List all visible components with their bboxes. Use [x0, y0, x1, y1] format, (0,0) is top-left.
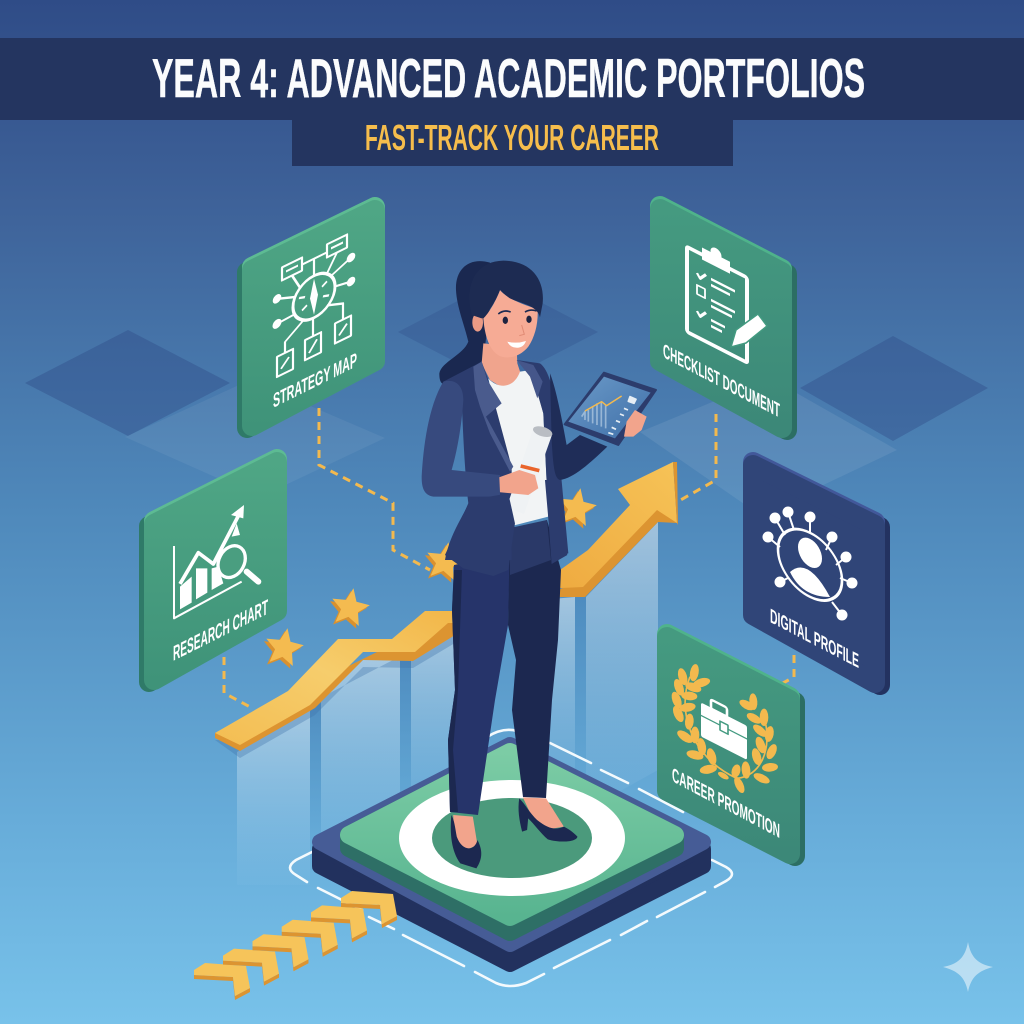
jacket right panel [517, 360, 568, 560]
facial features [498, 310, 537, 348]
neck [482, 343, 521, 388]
panel: career promotion [667, 634, 795, 856]
jacket left panel [443, 362, 512, 560]
panel: strategy map [247, 207, 375, 428]
arrow right segment [540, 462, 678, 597]
icon: chart with magnifier [174, 505, 258, 618]
upper body [422, 261, 656, 560]
growth arrow [215, 462, 678, 758]
right sleeve [550, 373, 607, 480]
chevron 6 [341, 891, 397, 928]
jacket hem [445, 480, 567, 576]
icon: pencil [731, 314, 767, 347]
subtitle: FAST-TRACK YOUR CAREER [365, 117, 659, 158]
icon: laurel wreath [670, 663, 779, 795]
chevron 2 [223, 949, 279, 986]
sparkle watermark [943, 942, 993, 992]
chevron 1 [194, 963, 250, 1000]
hand on scroll [499, 470, 538, 495]
header banner [0, 38, 1024, 166]
label: digital profile: DIGITAL PROFILE [770, 604, 859, 673]
shirt [488, 370, 548, 526]
arrow left segment [215, 611, 460, 758]
right lapel [517, 360, 543, 398]
panel: checklist document [660, 206, 787, 430]
target centre [432, 798, 592, 878]
figure: businesswoman [422, 261, 656, 868]
dashed connectors [224, 408, 794, 708]
platform [320, 745, 703, 964]
trousers [448, 520, 561, 815]
left sleeve [422, 381, 500, 497]
stars [260, 485, 599, 670]
ear [472, 313, 483, 332]
face [483, 290, 538, 357]
platform base [320, 747, 703, 964]
target ring [399, 780, 625, 896]
ponytail [439, 261, 490, 384]
panel: research chart: RESEARCH CHART [173, 595, 268, 666]
star 2 [326, 585, 372, 630]
icon: compass network [274, 231, 354, 379]
chevron 4 [282, 920, 338, 957]
tablet [565, 373, 656, 445]
star 4 [421, 539, 467, 584]
scroll [507, 424, 554, 514]
panel: digital profile [753, 462, 880, 685]
label: career promotion: CAREER PROMOTION [672, 763, 780, 843]
star 1 [260, 625, 306, 670]
star 3 [553, 485, 599, 530]
chevron 5 [311, 905, 367, 942]
background isometric tiles [25, 280, 988, 515]
icon: networked profile [764, 508, 856, 620]
platform green tier side [349, 752, 675, 932]
chevron path [194, 891, 397, 1000]
panel: checklist document: CHECKLIST DOCUMENT [663, 339, 780, 423]
left lapel [473, 362, 513, 472]
pocket [470, 513, 495, 520]
translucent bar columns under the growth arrow [237, 522, 658, 885]
panel: research chart [149, 459, 277, 682]
hand on tablet [624, 410, 647, 437]
feet and heels [451, 797, 577, 868]
chevron 3 [252, 934, 308, 971]
label: strategy map: STRATEGY MAP [273, 349, 357, 413]
platform green top [349, 752, 675, 917]
dashed platform outline [290, 730, 732, 986]
icon: briefcase [701, 694, 747, 760]
hair [469, 261, 543, 318]
icon: clipboard [687, 233, 747, 362]
